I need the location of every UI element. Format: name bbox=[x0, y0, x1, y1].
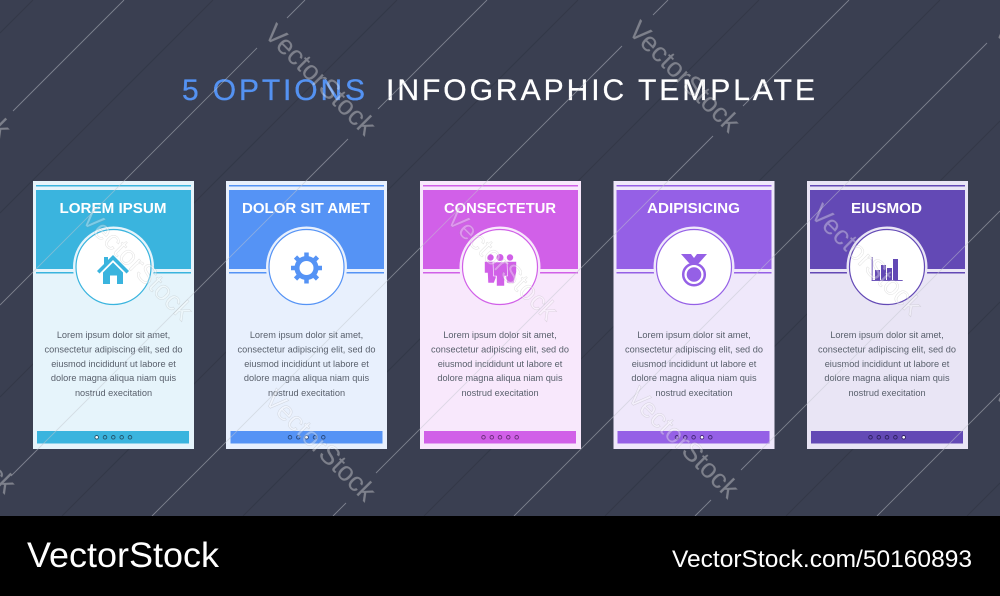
icon: bar chart bbox=[872, 257, 903, 281]
text block: dolore magna aliqua niam quis bbox=[824, 373, 950, 383]
panel: eiusmod bbox=[807, 181, 968, 449]
footer url: VectorStock.com/50160893 bbox=[672, 546, 972, 573]
text block bbox=[818, 330, 956, 398]
text block: eiusmod incididunt ut labore et bbox=[632, 359, 757, 369]
text block: consectetur adipiscing elit, sed do bbox=[431, 344, 569, 354]
text block: consectetur adipiscing elit, sed do bbox=[45, 344, 182, 354]
text block: dolore magna aliqua niam quis bbox=[51, 373, 176, 383]
footer logo: VectorStock bbox=[27, 536, 220, 575]
panel: lorem ipsum bbox=[33, 181, 194, 449]
heading: EIUSMOD bbox=[851, 201, 922, 217]
text block: Lorem ipsum dolor sit amet, bbox=[443, 330, 557, 340]
heading: ADIPISICING bbox=[647, 201, 740, 217]
text block: nostrud execitation bbox=[461, 388, 539, 398]
watermarks: VectorStock bbox=[441, 203, 564, 326]
text block bbox=[431, 330, 569, 398]
text block: nostrud execitation bbox=[75, 388, 152, 398]
panel: adipisicing bbox=[614, 181, 774, 449]
title: INFOGRAPHIC TEMPLATE bbox=[386, 74, 815, 107]
text block: eiusmod incididunt ut labore et bbox=[438, 359, 563, 369]
pager bar bbox=[424, 431, 576, 444]
heading: CONSECTETUR bbox=[444, 201, 557, 217]
icon: medal bbox=[681, 254, 707, 285]
text block: consectetur adipiscing elit, sed do bbox=[625, 344, 763, 354]
text block bbox=[238, 330, 375, 398]
watermarks: VectorStock bbox=[259, 18, 382, 141]
text block: nostrud execitation bbox=[848, 388, 926, 398]
icon: house bbox=[97, 255, 129, 284]
text block bbox=[625, 330, 763, 398]
text block: eiusmod incididunt ut labore et bbox=[825, 359, 950, 369]
panel: dolor sit amet bbox=[226, 181, 387, 449]
pager bar bbox=[618, 431, 770, 444]
watermarks: VectorStock bbox=[259, 384, 382, 507]
text block: dolore magna aliqua niam quis bbox=[437, 373, 563, 383]
watermarks: VectorStock bbox=[622, 381, 745, 504]
watermarks: VectorStock bbox=[623, 15, 746, 138]
text block bbox=[45, 330, 182, 398]
text block: Lorem ipsum dolor sit amet, bbox=[57, 330, 170, 340]
text block: eiusmod incididunt ut labore et bbox=[244, 359, 369, 369]
text block: nostrud execitation bbox=[655, 388, 733, 398]
text block: consectetur adipiscing elit, sed do bbox=[238, 344, 375, 354]
text block: consectetur adipiscing elit, sed do bbox=[818, 344, 956, 354]
heading: DOLOR SIT AMET bbox=[242, 201, 370, 217]
pager bar bbox=[811, 431, 963, 444]
text block: eiusmod incididunt ut labore et bbox=[51, 359, 176, 369]
pager bar bbox=[230, 431, 382, 444]
icon: people bbox=[484, 254, 516, 286]
pager bar bbox=[37, 431, 189, 444]
text block: Lorem ipsum dolor sit amet, bbox=[637, 330, 751, 340]
watermarks: VectorStock bbox=[76, 203, 199, 326]
text block: Lorem ipsum dolor sit amet, bbox=[830, 330, 944, 340]
panel: consectetur bbox=[420, 181, 581, 449]
text block: dolore magna aliqua niam quis bbox=[244, 373, 369, 383]
title bbox=[182, 74, 815, 107]
text block: nostrud execitation bbox=[268, 388, 345, 398]
text block: Lorem ipsum dolor sit amet, bbox=[250, 330, 363, 340]
icon: gear bbox=[291, 252, 322, 284]
title: 5 OPTIONS bbox=[182, 74, 365, 107]
watermarks: VectorStock bbox=[805, 198, 928, 321]
heading: LOREM IPSUM bbox=[60, 201, 166, 217]
text block: dolore magna aliqua niam quis bbox=[631, 373, 757, 383]
footer bar bbox=[0, 516, 1000, 596]
